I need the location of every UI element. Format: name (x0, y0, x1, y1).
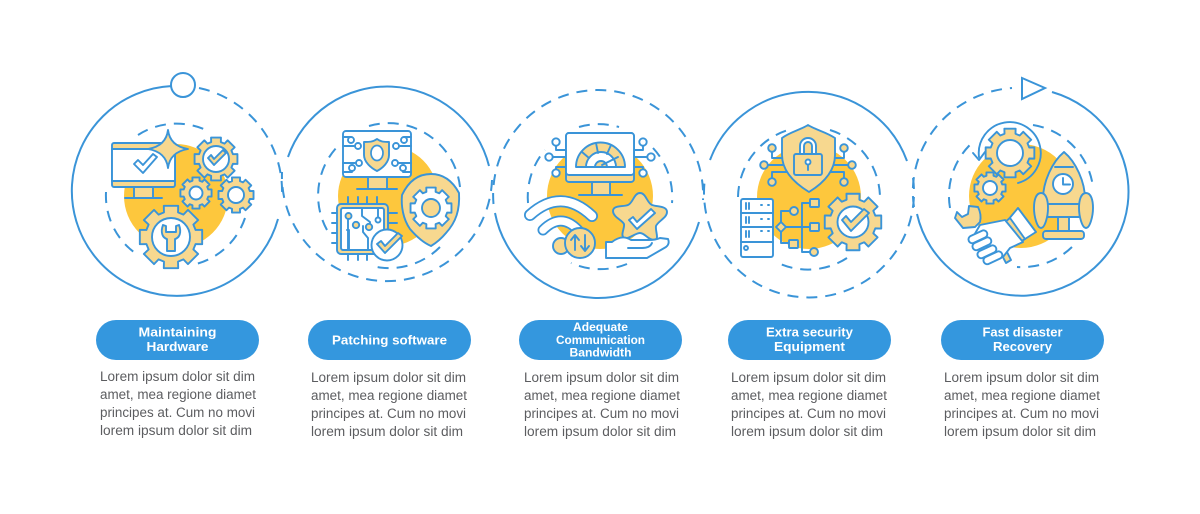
progress ring (493, 90, 703, 298)
pill heading (941, 320, 1104, 360)
progress ring (282, 87, 492, 281)
icon: gears, rocket and wrench hand (955, 122, 1093, 265)
pill heading (728, 320, 891, 360)
icon: lock shield, server, network and gear (741, 125, 881, 257)
yellow backdrop circle (124, 144, 228, 248)
pill heading: Communication (556, 335, 645, 347)
body text: amet, mea regione diamet (524, 388, 680, 403)
panel: maintaining hardware (72, 73, 282, 438)
yellow backdrop circle (547, 143, 653, 249)
pill heading: Fast disaster (982, 324, 1062, 340)
body text: lorem ipsum dolor sit dim (944, 424, 1096, 439)
pill heading: Extra security (766, 324, 854, 340)
pill heading: Hardware (146, 339, 208, 354)
panel: extra security equipment (704, 92, 914, 439)
inner dashed ring (528, 124, 672, 269)
body text: amet, mea regione diamet (100, 387, 256, 402)
icon: secure monitor, chip and gear shield (332, 131, 459, 260)
body text: lorem ipsum dolor sit dim (524, 424, 676, 439)
yellow backdrop circle (969, 144, 1073, 248)
pill heading: Equipment (774, 339, 846, 354)
body text: principes at. Cum no movi (311, 406, 466, 421)
body text: lorem ipsum dolor sit dim (311, 424, 463, 439)
body text: amet, mea regione diamet (944, 388, 1100, 403)
body text: principes at. Cum no movi (524, 406, 679, 421)
body text (524, 370, 680, 439)
pill heading: Adequate (573, 322, 628, 334)
body text: Lorem ipsum dolor sit dim (100, 369, 255, 384)
body text: lorem ipsum dolor sit dim (731, 424, 883, 439)
yellow backdrop circle (757, 145, 861, 249)
body text: Lorem ipsum dolor sit dim (311, 370, 466, 385)
pill heading: Patching software (332, 332, 447, 348)
pill heading: Bandwidth (570, 348, 632, 360)
progress ring (704, 92, 914, 297)
body text: Lorem ipsum dolor sit dim (524, 370, 679, 385)
inner dashed ring (949, 125, 1093, 267)
body text (944, 370, 1100, 439)
body text (311, 370, 467, 439)
yellow backdrop circle (338, 146, 438, 246)
panel: adequate communication bandwidth (493, 90, 703, 439)
pill heading: Maintaining (138, 324, 217, 340)
icon: speed monitor, wifi and star in hand (530, 133, 669, 258)
panel: patching software (282, 87, 492, 439)
progress ring with start node (72, 73, 282, 296)
inner dashed ring (738, 130, 880, 270)
pill heading: Recovery (993, 339, 1053, 354)
body text: lorem ipsum dolor sit dim (100, 423, 252, 438)
pill heading (519, 320, 682, 360)
pill heading (96, 320, 259, 360)
body text: principes at. Cum no movi (100, 405, 255, 420)
body text: Lorem ipsum dolor sit dim (944, 370, 1099, 385)
body text (731, 370, 887, 439)
body text: Lorem ipsum dolor sit dim (731, 370, 886, 385)
pill heading (308, 320, 471, 360)
progress ring with end arrow (913, 78, 1129, 296)
panel: fast disaster recovery (913, 78, 1129, 439)
icon: monitor, sparkle and gears (112, 130, 254, 268)
inner dashed ring (106, 124, 245, 265)
body text: principes at. Cum no movi (944, 406, 1099, 421)
body text (100, 369, 256, 438)
body text: amet, mea regione diamet (731, 388, 887, 403)
body text: principes at. Cum no movi (731, 406, 886, 421)
inner dashed ring (318, 123, 460, 268)
body text: amet, mea regione diamet (311, 388, 467, 403)
